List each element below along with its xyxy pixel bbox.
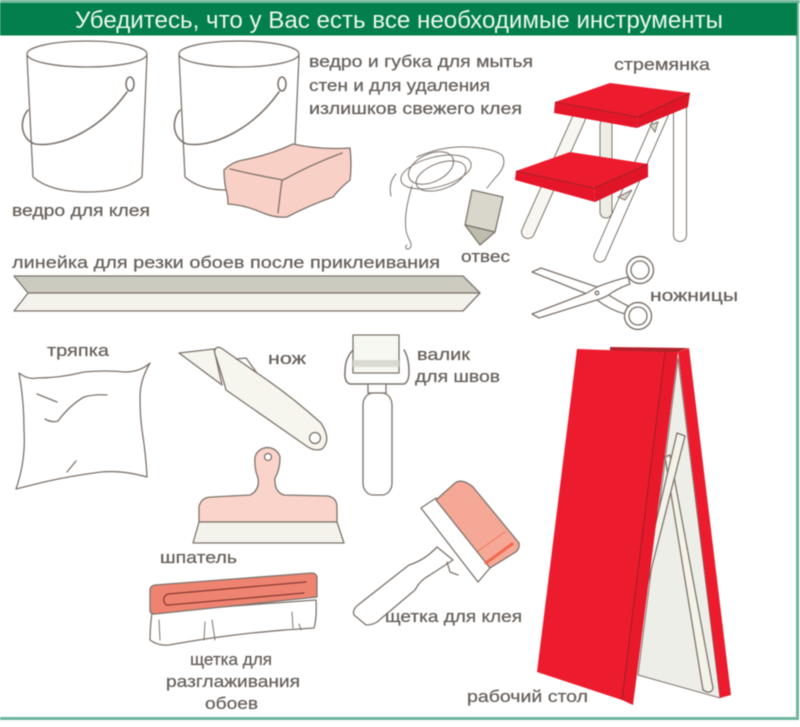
label: seam roller: валик	[417, 345, 471, 364]
label: knife: нож	[268, 349, 307, 368]
icon: bucket and sponge	[174, 41, 351, 217]
label: plumb line: отвес	[461, 247, 511, 266]
icon: work table	[537, 347, 731, 705]
label: bucket and sponge: ведро и губка для мытья	[309, 52, 533, 71]
icon: smoothing brush	[150, 573, 317, 645]
label: bucket for paste: ведро для клея	[12, 201, 150, 220]
title banner	[0, 0, 800, 36]
title banner: Убедитесь, что у Вас есть все необходимые инструменты	[75, 7, 723, 34]
icon: plumb line	[390, 145, 504, 249]
label: scissors: ножницы	[650, 286, 738, 305]
label: work table: рабочий стол	[467, 687, 588, 706]
icon: ruler	[14, 276, 480, 311]
label: seam roller	[415, 345, 500, 386]
label: smoothing brush: щетка для	[190, 650, 272, 669]
icon: seam roller	[345, 335, 409, 495]
label: rag: тряпка	[47, 341, 110, 360]
label: smoothing brush: обоев	[205, 694, 258, 713]
icon: rag	[16, 363, 150, 489]
label: bucket and sponge: стен и для удаления	[309, 76, 490, 95]
label: smoothing brush: разглаживания	[166, 672, 300, 691]
label: ruler: линейка для резки обоев после приклеивания	[12, 253, 440, 272]
icon: paste brush	[354, 481, 519, 625]
label: paste brush: щетка для клея	[385, 607, 522, 626]
label: bucket and sponge	[309, 52, 533, 118]
label: seam roller: для швов	[415, 367, 500, 386]
label: smoothing brush	[166, 650, 300, 713]
label: spatula: шпатель	[160, 548, 237, 567]
label: bucket and sponge: излишков свежего клея	[309, 99, 522, 118]
icon: bucket for paste	[22, 41, 147, 192]
icon: knife	[179, 347, 327, 450]
sponge	[224, 144, 351, 217]
label: stepladder: стремянка	[614, 55, 711, 74]
icon: scissors	[532, 256, 654, 330]
icon: stepladder	[515, 83, 690, 256]
icon: spatula	[193, 448, 344, 543]
